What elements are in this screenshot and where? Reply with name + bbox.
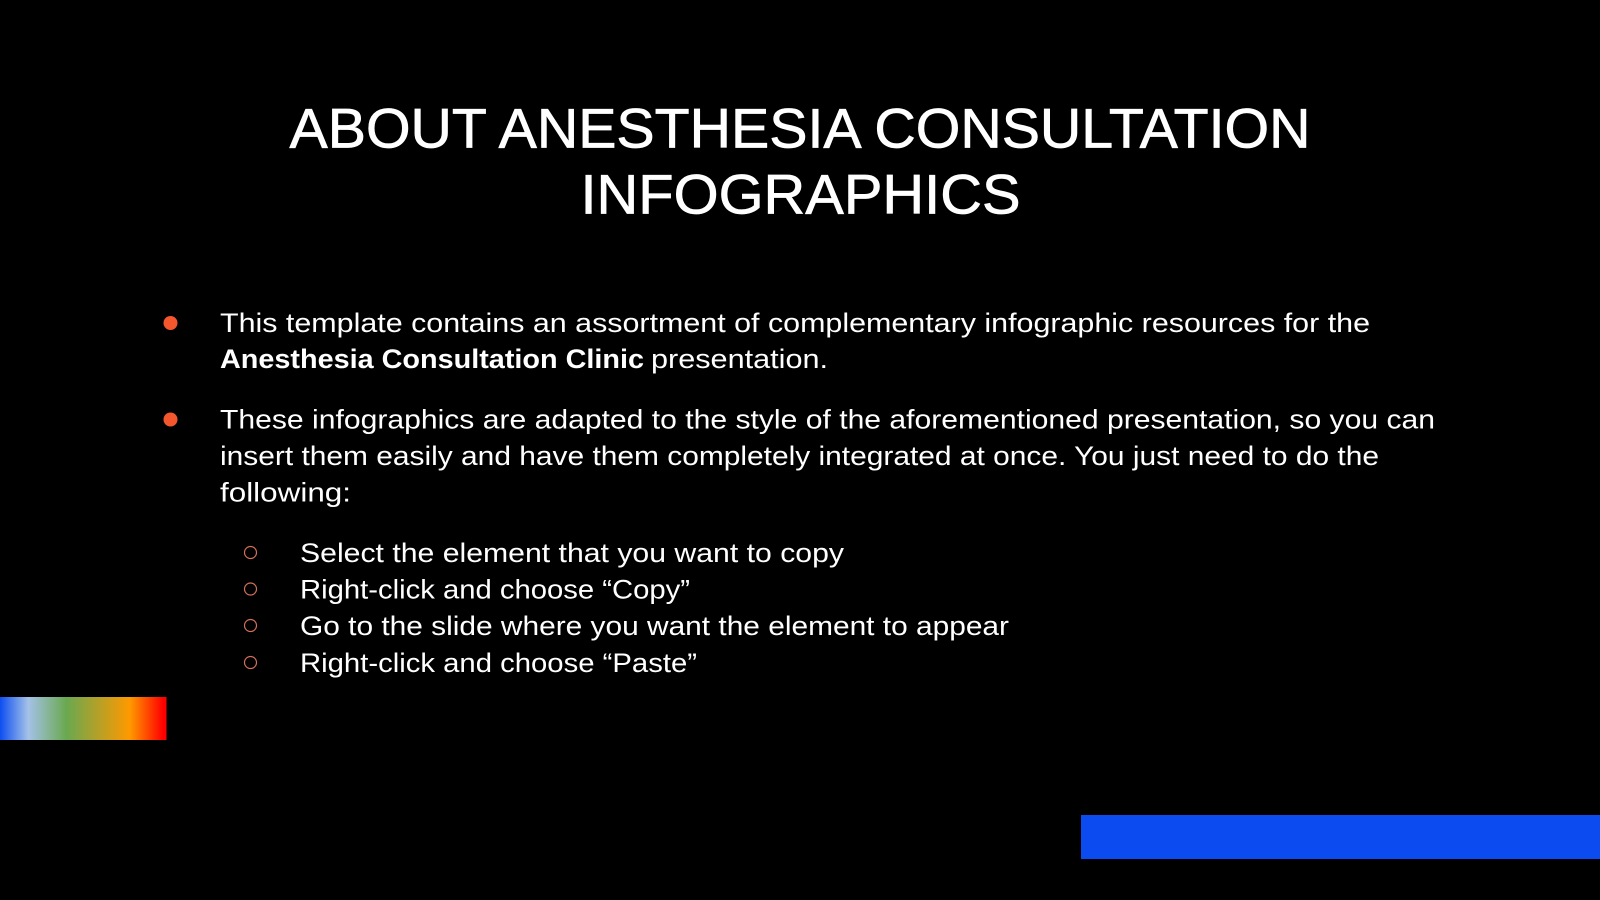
sub-list: copy and paste steps — [244, 538, 1009, 678]
bullet point: how infographics are adapted: insert them easily and have them completely integrated at once. You just need to do the — [220, 441, 1379, 471]
blue accent bar — [1081, 815, 1600, 859]
bullet point: template description: presentation. — [651, 344, 828, 374]
title — [290, 96, 1310, 226]
bullet point: template description — [164, 308, 1370, 374]
step: go to slide: Go to the slide where you want the element to appear — [300, 611, 1009, 641]
gradient spectrum bar — [0, 697, 166, 740]
title: INFOGRAPHICS — [580, 162, 1020, 226]
bullet point: template description: This template contains an assortment of complementary infographic resources for the — [220, 308, 1370, 338]
bullet point: template description: Anesthesia Consultation Clinic — [220, 344, 644, 374]
step: paste: Right-click and choose “Paste” — [300, 648, 697, 678]
bullet point: how infographics are adapted: These infographics are adapted to the style of the aforementioned presentation, so you can — [220, 404, 1435, 434]
bullet point: how infographics are adapted: following: — [220, 478, 351, 508]
bullet list: intro paragraphs — [164, 308, 1435, 508]
title: ABOUT ANESTHESIA CONSULTATION — [290, 96, 1310, 160]
step: select: Select the element that you want to copy — [300, 538, 845, 568]
bullet point: how infographics are adapted — [164, 404, 1435, 508]
step: copy: Right-click and choose “Copy” — [300, 574, 690, 604]
